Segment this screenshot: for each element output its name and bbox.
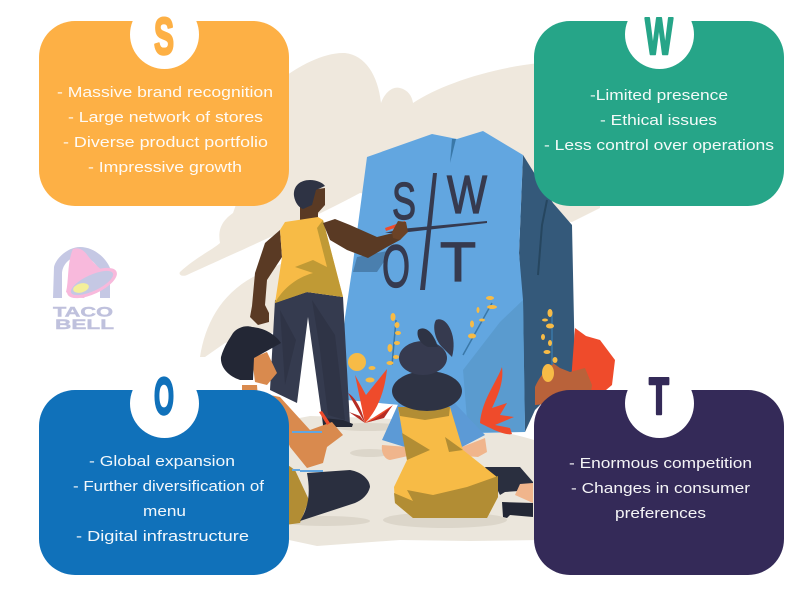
illustration: sitting woman on the left — [221, 326, 370, 525]
panel: weaknesses — [534, 0, 784, 206]
text block: strengths list: - Large network of stores — [68, 109, 263, 126]
text block: threats list — [569, 455, 752, 522]
text block: opportunities list: - Global expansion — [89, 453, 235, 470]
text block: strengths list: - Massive brand recognition — [57, 84, 273, 101]
text block: weaknesses list: - Less control over operations — [544, 137, 774, 154]
text block: opportunities list — [73, 453, 265, 545]
heading: T: T — [649, 368, 669, 426]
carved SWOT letters: T — [440, 230, 476, 293]
carved SWOT letters — [382, 165, 487, 300]
logo: Taco Bell: TACO — [53, 304, 113, 320]
illustration: sitting woman on the right — [382, 319, 533, 518]
carved SWOT letters: O — [382, 233, 410, 300]
panel: strengths — [39, 0, 289, 206]
illustration: stone monument — [343, 131, 575, 433]
illustration: background clouds and ground — [180, 53, 600, 546]
illustration: standing man writing on the stone — [250, 180, 408, 427]
carved SWOT letters: W — [447, 165, 487, 225]
logo: Taco Bell — [53, 247, 121, 332]
illustration: plants — [348, 296, 615, 434]
panel: threats — [534, 368, 784, 575]
text block: opportunities list: - Digital infrastructure — [76, 528, 249, 545]
heading: S: S — [154, 8, 174, 66]
text block: weaknesses list: -Limited presence — [590, 87, 728, 104]
text block: opportunities list: - Further diversification of — [73, 478, 265, 495]
text block: strengths list: - Impressive growth — [88, 159, 242, 176]
panel: opportunities — [39, 368, 289, 575]
text block: weaknesses list: - Ethical issues — [600, 112, 717, 129]
logo: Taco Bell: BELL — [55, 317, 114, 332]
illustration: ground shadows — [280, 423, 507, 528]
text block: threats list: - Changes in consumer — [571, 480, 750, 497]
heading: W: W — [645, 8, 674, 66]
carved SWOT letters: S — [392, 173, 416, 231]
text block: weaknesses list — [544, 87, 774, 154]
text block: opportunities list: menu — [143, 503, 186, 520]
text block: strengths list: - Diverse product portfolio — [63, 134, 268, 151]
panel: opportunities: O — [154, 368, 174, 426]
text block: strengths list — [57, 84, 273, 176]
text block: threats list: - Enormous competition — [569, 455, 752, 472]
text block: threats list: preferences — [615, 505, 706, 522]
